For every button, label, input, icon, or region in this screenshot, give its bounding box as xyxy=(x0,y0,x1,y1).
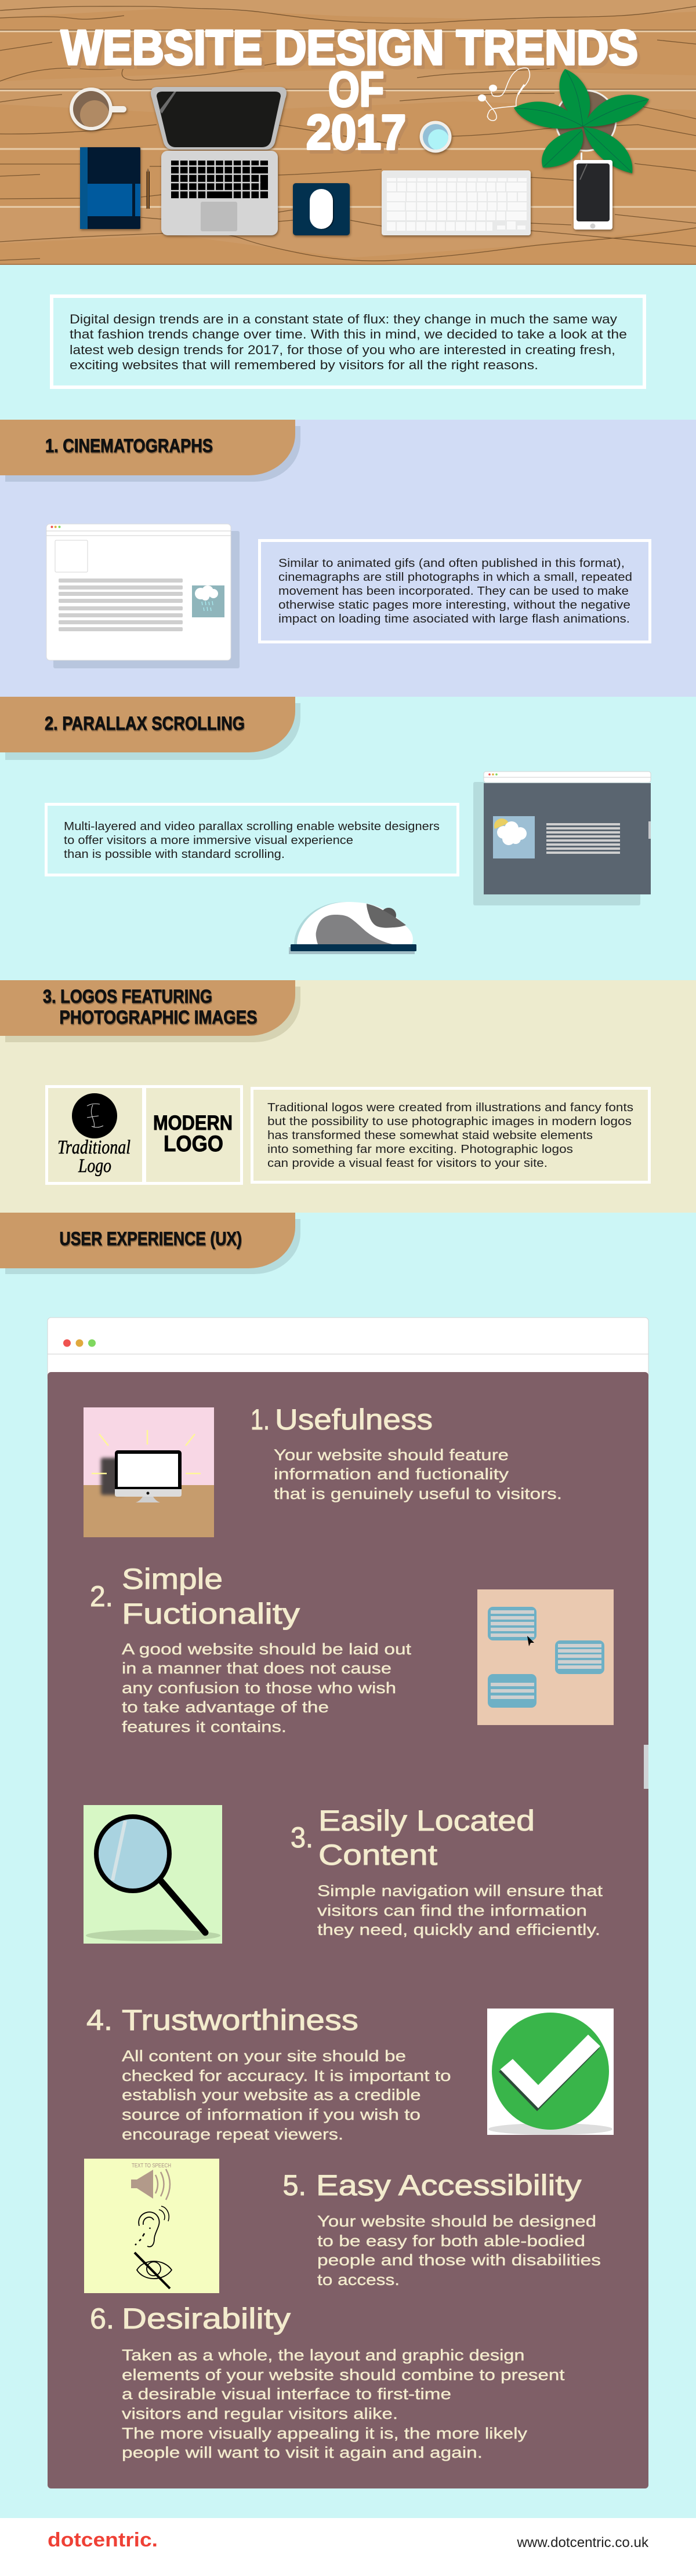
item 4: trustworthiness: encourage repeat viewers. xyxy=(122,2126,343,2143)
icon: potted plant xyxy=(514,69,649,173)
item 6: desirability: people will want to visit it again and again. xyxy=(122,2444,483,2461)
icon: glass of water xyxy=(420,121,451,153)
item 5: easy accessibility: people and those with disabilities xyxy=(317,2251,601,2269)
item 3: easily located content: Simple navigation will ensure that xyxy=(317,1882,603,1900)
item 4: trustworthiness: source of information if you wish to xyxy=(122,2106,420,2123)
text box: logos: has transformed these somewhat staid website elements xyxy=(267,1129,593,1142)
illustration: accessibility icons: TEXT TO SPEECH xyxy=(132,2163,171,2169)
item 4: trustworthiness: Trustworthiness xyxy=(122,2004,358,2036)
text box: cinemagraphs: otherwise static pages more interesting, without the negative xyxy=(278,599,630,612)
item 4: trustworthiness: 4. xyxy=(86,2004,113,2036)
browser illustration: cinemagraph page xyxy=(46,524,240,668)
logo comparison: traditional and modern: LOGO xyxy=(164,1131,223,1156)
heading tab: parallax scrolling: 2. PARALLAX SCROLLING xyxy=(45,713,245,734)
panel: intro text xyxy=(52,296,644,387)
heading tab: logos: 3. LOGOS FEATURING xyxy=(43,986,212,1007)
item 6: desirability: a desirable visual interface to first-time xyxy=(122,2385,451,2403)
item 2: simple functionality: 2. xyxy=(90,1580,113,1613)
item 6: desirability: visitors and regular visitors alike. xyxy=(122,2405,398,2422)
illustration: accessibility icons xyxy=(84,2159,219,2293)
item 2: simple functionality: to take advantage of the xyxy=(122,1698,329,1716)
panel: intro text: exciting websites that will remembered by visitors for all the right reasons. xyxy=(70,358,538,372)
item 4: trustworthiness: checked for accuracy. It is important to xyxy=(122,2067,451,2084)
heading tab: logos xyxy=(0,980,300,1042)
item 6: desirability: The more visually appealing it is, the more likely xyxy=(122,2425,528,2442)
item 6: desirability: 6. xyxy=(90,2302,114,2335)
footer: dotcentric. xyxy=(48,2529,158,2551)
browser illustration: parallax page xyxy=(473,772,651,905)
item 2: simple functionality: Fuctionality xyxy=(122,1598,300,1630)
logo comparison: traditional and modern: MODERN xyxy=(153,1112,233,1134)
item 6: desirability: Desirability xyxy=(122,2302,291,2335)
illustration: glowing monitor xyxy=(84,1407,214,1537)
icon: keyboard xyxy=(382,170,531,235)
item 4: trustworthiness: establish your website as a credible xyxy=(122,2086,421,2104)
item 1: usefulness xyxy=(84,1403,562,1537)
item 2: simple functionality xyxy=(90,1563,614,1735)
text box: cinemagraphs: cinemagraphs are still photographs in which a small, repeated xyxy=(278,571,632,584)
item 2: simple functionality: Simple xyxy=(122,1563,223,1595)
item 1: usefulness: Usefulness xyxy=(275,1403,433,1436)
logo comparison: traditional and modern: Logo xyxy=(78,1155,111,1177)
heading tab: user experience xyxy=(0,1213,300,1274)
text box: logos xyxy=(252,1089,650,1183)
logo comparison: traditional and modern xyxy=(46,1086,241,1184)
icon: computer mouse side view xyxy=(289,902,416,954)
browser window: user experience xyxy=(48,1318,648,2488)
item 4: trustworthiness xyxy=(86,2004,614,2143)
item 3: easily located content: Easily Located xyxy=(318,1804,535,1837)
text box: cinemagraphs: Similar to animated gifs (and often published in this format), xyxy=(278,557,625,570)
heading tab: cinematographs: 1. CINEMATOGRAPHS xyxy=(45,435,213,456)
item 2: simple functionality: in a manner that does not cause xyxy=(122,1660,392,1677)
item 3: easily located content: they need, quickly and efficiently. xyxy=(317,1921,600,1938)
title: 2017 xyxy=(306,105,406,159)
item 5: easy accessibility: to access. xyxy=(317,2271,400,2288)
heading tab: parallax scrolling xyxy=(0,697,300,760)
illustration: magnifying glass xyxy=(84,1805,222,1944)
text box: parallax scrolling: than is possible with standard scrolling. xyxy=(64,848,285,861)
item 5: easy accessibility: Easy Accessibility xyxy=(316,2169,581,2202)
text box: cinemagraphs: movement has been incorporated. They can be used to make xyxy=(278,585,629,598)
title: WEBSITE DESIGN TRENDS xyxy=(61,20,638,75)
text box: logos: can provide a visual feast for visitors to your site. xyxy=(267,1157,548,1170)
item 1: usefulness: Your website should feature xyxy=(274,1446,509,1464)
icon: coffee cup xyxy=(70,88,126,130)
heading tab: user experience: USER EXPERIENCE (UX) xyxy=(59,1228,242,1249)
item 6: desirability xyxy=(90,2302,565,2461)
title xyxy=(61,20,638,159)
panel: cinematographs xyxy=(0,420,696,697)
footer: www.dotcentric.co.uk xyxy=(516,2535,649,2550)
text box: parallax scrolling: to offer visitors a more immersive visual experience xyxy=(64,834,353,847)
title: OF xyxy=(328,62,384,117)
item 5: easy accessibility: Your website should be designed xyxy=(317,2213,596,2230)
panel: intro text: that fashion trends change over time. With this in mind, we decided to take a look at the xyxy=(70,327,627,341)
panel: logos featuring photographic images xyxy=(0,980,696,1213)
text box: cinemagraphs: impact on loading time asociated with large flash animations. xyxy=(278,613,630,625)
footer xyxy=(0,2518,696,2576)
item 1: usefulness: information and fuctionality xyxy=(274,1465,509,1483)
text box: logos: into something far more exciting. Photographic logos xyxy=(267,1143,573,1156)
item 4: trustworthiness: All content on your site should be xyxy=(122,2047,406,2065)
item 3: easily located content: visitors can find the information xyxy=(317,1902,587,1919)
heading tab: logos: PHOTOGRAPHIC IMAGES xyxy=(59,1007,258,1028)
text box: logos: but the possibility to use photographic images in modern logos xyxy=(267,1115,632,1128)
item 3: easily located content: 3. xyxy=(291,1821,313,1854)
text box: logos: Traditional logos were created from illustrations and fancy fonts xyxy=(267,1101,633,1114)
icon: pencil xyxy=(146,168,150,209)
icon: notebook xyxy=(80,147,140,229)
icon: smartphone xyxy=(574,160,612,230)
item 6: desirability: Taken as a whole, the layout and graphic design xyxy=(122,2346,524,2364)
item 3: easily located content: Content xyxy=(318,1839,437,1871)
illustration: navigation cards xyxy=(477,1589,614,1725)
item 2: simple functionality: any confusion to those who wish xyxy=(122,1679,396,1697)
illustration: green check mark xyxy=(487,2009,614,2135)
text box: parallax scrolling: Multi-layered and video parallax scrolling enable website designers xyxy=(64,820,440,833)
panel: intro text: Digital design trends are in a constant state of flux: they change in much the same way xyxy=(70,312,617,326)
panel: intro text: latest web design trends for 2017, for those of you who are interested in creating fresh, xyxy=(70,343,615,357)
header: wooden desk xyxy=(0,0,696,265)
text box: parallax scrolling xyxy=(46,805,458,875)
item 1: usefulness: that is genuinely useful to visitors. xyxy=(274,1485,562,1502)
item 2: simple functionality: features it contains. xyxy=(122,1718,287,1735)
item 6: desirability: elements of your website should combine to present xyxy=(122,2366,565,2384)
logo comparison: traditional and modern: Traditional xyxy=(57,1137,130,1158)
item 3: easily located content xyxy=(84,1804,603,1944)
item 5: easy accessibility: 5. xyxy=(283,2169,306,2202)
item 5: easy accessibility xyxy=(84,2159,601,2293)
icon: mouse and pad xyxy=(293,183,350,235)
icon: earphones xyxy=(478,68,530,121)
item 1: usefulness: 1. xyxy=(251,1403,270,1436)
icon: laptop xyxy=(151,87,287,235)
heading tab: cinematographs xyxy=(0,420,300,482)
item 5: easy accessibility: to be easy for both able-bodied xyxy=(317,2232,585,2250)
item 2: simple functionality: A good website should be laid out xyxy=(122,1640,412,1658)
text box: cinemagraphs xyxy=(260,540,650,642)
